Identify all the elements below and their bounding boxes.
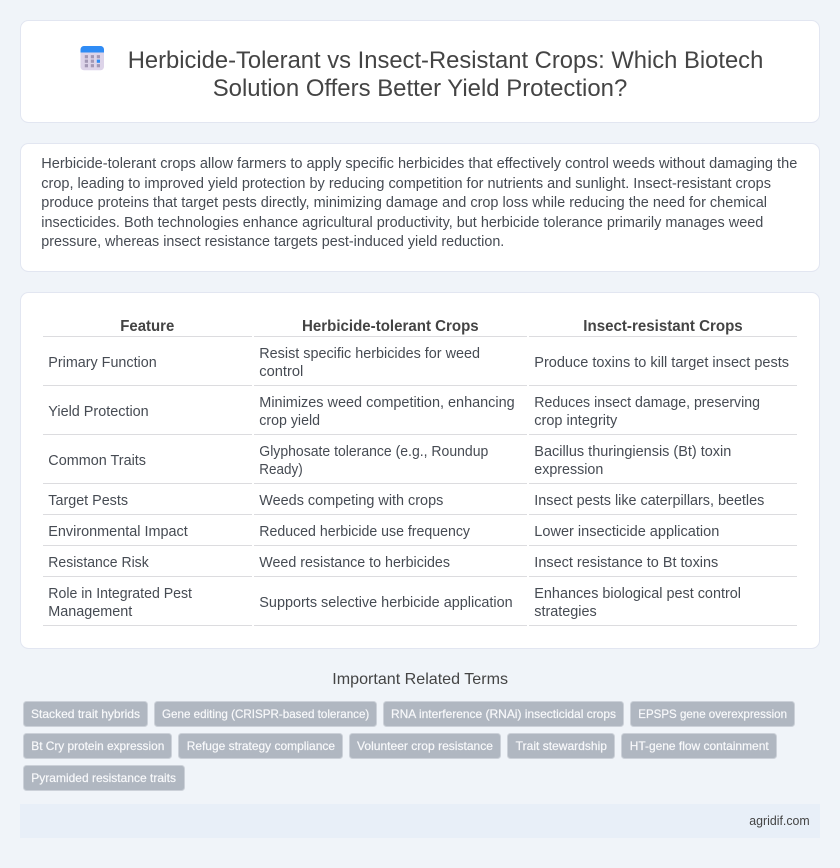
row: environmental impact: Lower insecticide application bbox=[534, 524, 719, 540]
panel: comparison table bbox=[20, 292, 820, 648]
tag: EPSPS gene overexpression: EPSPS gene overexpression bbox=[638, 707, 787, 721]
summary paragraph: pressure, whereas insect resistance targets pest-induced yield reduction. bbox=[41, 234, 504, 250]
panel: summary text bbox=[20, 144, 820, 272]
row: common traits bbox=[48, 444, 731, 478]
row: target pests: Insect pests like caterpillars, beetles bbox=[534, 493, 764, 509]
tag: gene editing: Gene editing (CRISPR-based tolerance) bbox=[162, 707, 369, 721]
heading: important related terms: Important Related Terms bbox=[332, 671, 508, 688]
row: resistance risk: Weed resistance to herbicides bbox=[259, 555, 450, 571]
title bbox=[128, 47, 763, 102]
row: target pests bbox=[48, 493, 764, 509]
row: common traits: Glyphosate tolerance (e.g., Roundup bbox=[259, 444, 488, 460]
tag: pyramided resistance traits bbox=[24, 766, 184, 790]
tag: refuge strategy compliance: Refuge strategy compliance bbox=[187, 739, 335, 753]
row: resistance risk: Resistance Risk bbox=[48, 555, 149, 571]
row: common traits: expression bbox=[534, 462, 603, 478]
table header row: Herbicide-tolerant Crops bbox=[302, 318, 479, 335]
tag: gene editing bbox=[154, 702, 376, 726]
title: Solution Offers Better Yield Protection? bbox=[213, 75, 627, 102]
tag: trait stewardship bbox=[508, 734, 614, 758]
footer bbox=[20, 804, 820, 838]
row: primary function bbox=[48, 346, 789, 380]
tag: pyramided resistance traits: Pyramided resistance traits bbox=[31, 771, 176, 785]
related term tags bbox=[24, 702, 794, 790]
summary paragraph bbox=[41, 156, 797, 250]
tag: RNA interference: RNA interference (RNAi) insecticidal crops bbox=[391, 707, 616, 721]
tag: Bt Cry protein expression bbox=[24, 734, 172, 758]
tag: volunteer crop resistance: Volunteer crop resistance bbox=[357, 739, 493, 753]
panel: header bbox=[20, 20, 820, 122]
row: primary function: Primary Function bbox=[48, 355, 157, 371]
tag: EPSPS gene overexpression bbox=[630, 702, 794, 726]
row: resistance risk bbox=[48, 555, 718, 571]
row: primary function: control bbox=[259, 364, 303, 380]
title: Herbicide-Tolerant vs Insect-Resistant Crops: Which Biotech bbox=[128, 47, 763, 74]
row: role in integrated pest management: strategies bbox=[534, 604, 597, 620]
row: role in integrated pest management bbox=[48, 586, 741, 620]
summary paragraph: produce proteins that target pests directly, minimizing damage and crop loss while reducing the need for chemical bbox=[41, 195, 767, 211]
row: yield protection bbox=[48, 395, 760, 429]
table header row: Feature bbox=[120, 318, 174, 335]
row: yield protection: Yield Protection bbox=[48, 404, 149, 420]
tag: trait stewardship: Trait stewardship bbox=[516, 739, 607, 753]
table header row bbox=[120, 318, 743, 335]
row: common traits: Common Traits bbox=[48, 453, 146, 469]
row: yield protection: crop integrity bbox=[534, 413, 618, 429]
summary paragraph: Herbicide-tolerant crops allow farmers to apply specific herbicides that effectively control weeds without damaging the bbox=[41, 156, 797, 172]
tag: stacked trait hybrids bbox=[24, 702, 148, 726]
row: yield protection: Minimizes weed competition, enhancing bbox=[259, 395, 515, 411]
tag: refuge strategy compliance bbox=[178, 734, 342, 758]
row: yield protection: crop yield bbox=[259, 413, 320, 429]
row: environmental impact: Environmental Impact bbox=[48, 524, 188, 540]
row: target pests: Weeds competing with crops bbox=[259, 493, 443, 509]
row: role in integrated pest management: Supports selective herbicide application bbox=[259, 595, 513, 611]
tag: HT-gene flow containment bbox=[622, 734, 776, 758]
row: environmental impact bbox=[48, 524, 719, 540]
row: resistance risk: Insect resistance to Bt toxins bbox=[534, 555, 718, 571]
tag: volunteer crop resistance bbox=[350, 734, 500, 758]
tag: stacked trait hybrids: Stacked trait hybrids bbox=[31, 707, 140, 721]
summary paragraph: insecticides. Both technologies enhance agricultural productivity, but herbicide tolerance primarily manages weed bbox=[41, 215, 763, 231]
row: environmental impact: Reduced herbicide use frequency bbox=[259, 524, 471, 540]
footer: agridif.com bbox=[749, 813, 810, 828]
row: primary function: Resist specific herbicides for weed bbox=[259, 346, 480, 362]
row: role in integrated pest management: Enhances biological pest control bbox=[534, 586, 741, 602]
row: role in integrated pest management: Management bbox=[48, 604, 132, 620]
row: yield protection: Reduces insect damage, preserving bbox=[534, 395, 760, 411]
icon: calendar bbox=[80, 46, 104, 70]
row: common traits: Bacillus thuringiensis (Bt) toxin bbox=[534, 444, 731, 460]
tag: RNA interference bbox=[384, 702, 624, 726]
row: common traits: Ready) bbox=[259, 462, 303, 478]
table header row: Insect-resistant Crops bbox=[583, 318, 743, 335]
tag: HT-gene flow containment: HT-gene flow containment bbox=[630, 739, 769, 753]
row: role in integrated pest management: Role in Integrated Pest bbox=[48, 586, 192, 602]
row: target pests: Target Pests bbox=[48, 493, 128, 509]
tag: Bt Cry protein expression: Bt Cry protein expression bbox=[31, 739, 164, 753]
summary paragraph: crop, leading to improved yield protection by reducing competition for nutrients and sunlight. Insect-resistant crops bbox=[41, 176, 771, 192]
row: primary function: Produce toxins to kill target insect pests bbox=[534, 355, 789, 371]
